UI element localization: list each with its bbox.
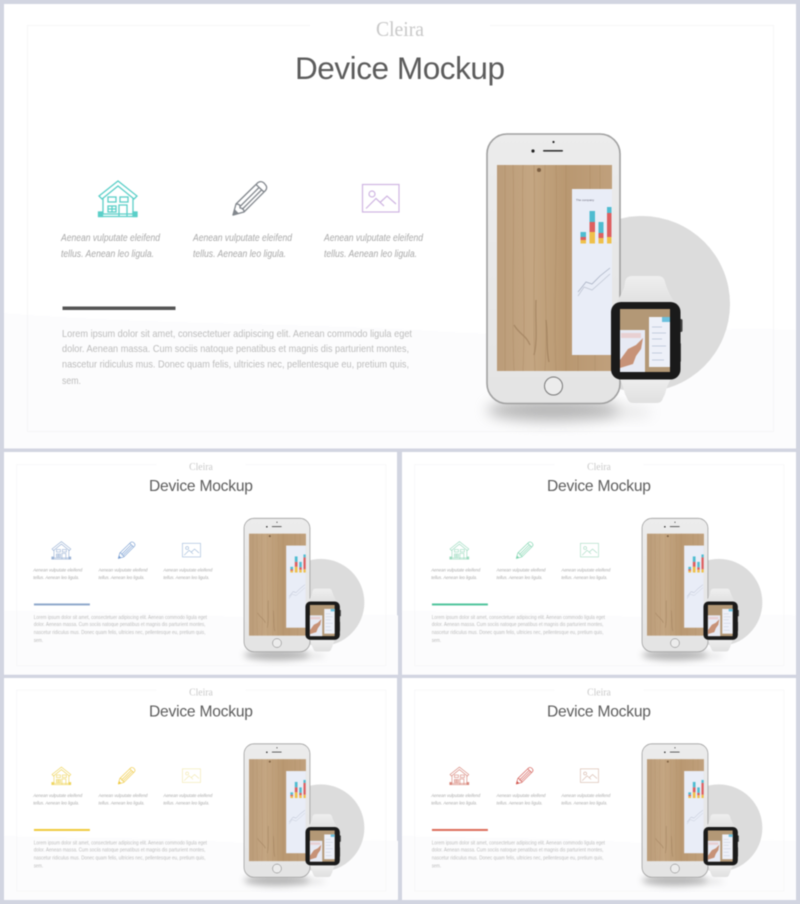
body text: Lorem ipsum dolor sit amet, consectetuer adipiscing elit. Aenean commodo ligula eget: [432, 615, 605, 621]
body text: Lorem ipsum dolor sit amet, consectetuer adipiscing elit. Aenean commodo ligula eget: [432, 840, 605, 846]
caption 2: Aenean vulputate eleifend: [98, 567, 148, 573]
brand name: Cleira: [587, 462, 611, 473]
accent bar: [34, 603, 90, 605]
body text: dolor. Aenean massa. Cum sociis natoque penatibus et magnis dis parturient montes,: [432, 622, 603, 628]
device mockup: phone and watch: [642, 744, 762, 886]
body text: dolor. Aenean massa. Cum sociis natoque penatibus et magnis dis parturient montes,: [34, 622, 205, 628]
caption 3: tellus. Aenean leo ligula.: [561, 801, 607, 807]
icon: house: [52, 542, 71, 559]
caption 1: Aenean vulputate eleifend: [32, 793, 82, 799]
caption 2: tellus. Aenean leo ligula.: [497, 575, 543, 581]
body text: sem.: [34, 638, 43, 644]
icon: image: [182, 543, 201, 557]
brand name: Cleira: [189, 462, 213, 473]
panel: blue slide: [4, 452, 398, 675]
body text: [432, 615, 605, 644]
brand name: Cleira: [376, 17, 425, 41]
caption 1: tellus. Aenean leo ligula.: [431, 801, 477, 807]
body text: sem.: [34, 864, 43, 870]
body text: [62, 328, 412, 387]
title: Device Mockup: [149, 478, 253, 495]
body text: nascetur ridiculus mus. Donec quam felis, ultricies nec, pellentesque eu, pretium quis,: [34, 630, 205, 636]
body text: dolor. Aenean massa. Cum sociis natoque penatibus et magnis dis parturient montes,: [34, 848, 205, 854]
brand name: Cleira: [587, 687, 611, 698]
title: Device Mockup: [149, 704, 253, 721]
icon: image: [580, 769, 599, 782]
body text: sem.: [432, 638, 441, 644]
body text: nascetur ridiculus mus. Donec quam felis, ultricies nec, pellentesque eu, pretium quis,: [34, 855, 205, 861]
icon: image: [182, 769, 201, 782]
caption 3: Aenean vulputate eleifend: [323, 233, 423, 244]
caption 2: tellus. Aenean leo ligula.: [99, 801, 145, 807]
caption 3: Aenean vulputate eleifend: [561, 567, 611, 573]
caption 1: tellus. Aenean leo ligula.: [33, 801, 79, 807]
body text: nascetur ridiculus mus. Donec quam felis, ultricies nec, pellentesque eu, pretium quis,: [432, 630, 603, 636]
caption 1: Aenean vulputate eleifend: [430, 567, 480, 573]
caption 2: Aenean vulputate eleifend: [98, 793, 148, 799]
caption 1: tellus. Aenean leo ligula.: [61, 249, 154, 260]
device mockup: phone and watch: [244, 744, 364, 886]
body text: Lorem ipsum dolor sit amet, consectetuer adipiscing elit. Aenean commodo ligula eget: [62, 328, 412, 340]
title: Device Mockup: [547, 478, 651, 495]
body text: [34, 615, 207, 644]
caption 3: [163, 793, 213, 807]
icon: pencil: [516, 542, 533, 558]
caption 1: Aenean vulputate eleifend: [32, 567, 82, 573]
icon: house: [98, 181, 137, 216]
icon: house: [52, 767, 71, 785]
panel: yellow slide: [4, 678, 398, 900]
caption 1: [430, 793, 480, 807]
icon: pencil: [118, 542, 135, 558]
caption 3: Aenean vulputate eleifend: [561, 793, 611, 799]
caption 2: [192, 233, 292, 260]
caption 1: [430, 567, 480, 581]
body text: sem.: [62, 375, 81, 387]
body text: nascetur ridiculus mus. Donec quam felis, ultricies nec, pellentesque eu, pretium quis,: [432, 855, 603, 861]
caption 2: Aenean vulputate eleifend: [496, 567, 546, 573]
caption 1: tellus. Aenean leo ligula.: [431, 575, 477, 581]
icon: house: [450, 542, 469, 559]
accent bar: [432, 829, 488, 831]
caption 3: tellus. Aenean leo ligula.: [163, 801, 209, 807]
accent bar: [432, 603, 488, 605]
body text: [34, 840, 207, 870]
body text: Lorem ipsum dolor sit amet, consectetuer adipiscing elit. Aenean commodo ligula eget: [34, 840, 207, 846]
body text: sem.: [432, 864, 441, 870]
caption 1: [60, 233, 160, 260]
accent bar: [62, 306, 176, 310]
brand name: Cleira: [189, 687, 213, 698]
caption 2: Aenean vulputate eleifend: [496, 793, 546, 799]
caption 2: [496, 567, 546, 581]
caption 3: [561, 567, 611, 581]
caption 3: [163, 567, 213, 581]
caption 1: Aenean vulputate eleifend: [60, 233, 160, 244]
title: Device Mockup: [295, 50, 505, 86]
icon: image: [580, 543, 599, 557]
device mockup: phone and watch: [642, 518, 762, 660]
caption 2: tellus. Aenean leo ligula.: [193, 249, 286, 260]
caption 3: tellus. Aenean leo ligula.: [561, 575, 607, 581]
caption 2: tellus. Aenean leo ligula.: [99, 575, 145, 581]
caption 2: Aenean vulputate eleifend: [192, 233, 292, 244]
caption 3: [323, 233, 423, 260]
caption 3: [561, 793, 611, 807]
chart label: The company: [576, 198, 595, 202]
body text: dolor. Aenean massa. Cum sociis natoque penatibus et magnis dis parturient montes,: [432, 848, 603, 854]
caption 3: Aenean vulputate eleifend: [163, 793, 213, 799]
icon: house: [450, 767, 469, 785]
device mockup: phone and watch: [487, 134, 730, 421]
caption 1: [32, 793, 82, 807]
body text: [432, 840, 605, 870]
icon: pencil: [118, 767, 135, 784]
caption 2: [98, 793, 148, 807]
panel: green slide: [402, 452, 796, 675]
caption 1: [32, 567, 82, 581]
caption 2: [496, 793, 546, 807]
icon: image: [362, 184, 399, 212]
caption 2: [98, 567, 148, 581]
caption 1: tellus. Aenean leo ligula.: [33, 575, 79, 581]
body text: nascetur ridiculus mus. Donec quam felis, ultricies nec, pellentesque eu, pretium quis,: [62, 358, 409, 370]
body text: Lorem ipsum dolor sit amet, consectetuer adipiscing elit. Aenean commodo ligula eget: [34, 615, 207, 621]
body text: dolor. Aenean massa. Cum sociis natoque penatibus et magnis dis parturient montes,: [62, 343, 409, 355]
icon: pencil: [516, 767, 533, 784]
icon: pencil: [233, 182, 267, 215]
device mockup: phone and watch: [244, 518, 364, 660]
panel: red slide: [402, 678, 796, 900]
caption 1: Aenean vulputate eleifend: [430, 793, 480, 799]
title: Device Mockup: [547, 704, 651, 721]
caption 2: tellus. Aenean leo ligula.: [497, 801, 543, 807]
caption 3: Aenean vulputate eleifend: [163, 567, 213, 573]
accent bar: [34, 829, 90, 831]
caption 3: tellus. Aenean leo ligula.: [163, 575, 209, 581]
caption 3: tellus. Aenean leo ligula.: [324, 249, 417, 260]
panel: main slide: [4, 4, 796, 448]
